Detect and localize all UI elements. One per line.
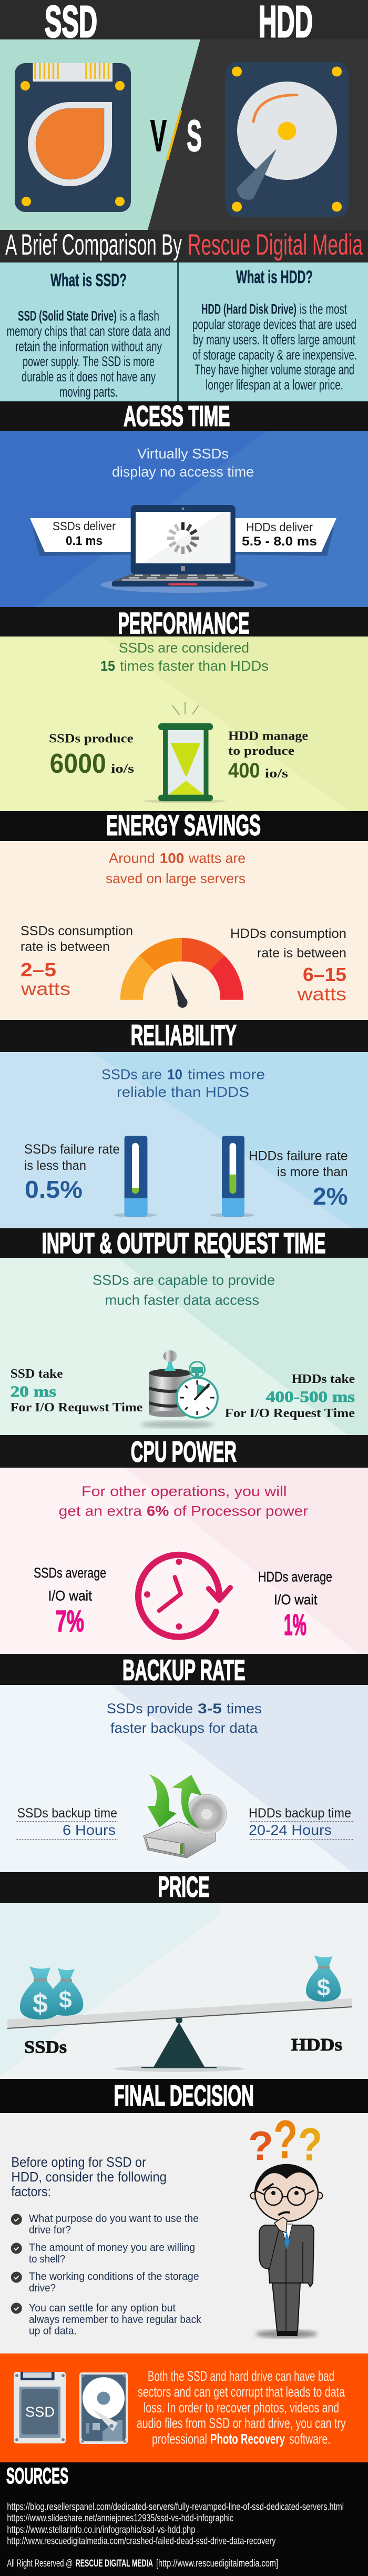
stat: HDD failure rate: 2% (313, 1183, 348, 1210)
heading: sources: SOURCES (6, 2463, 68, 2489)
icon: database with stopwatch (140, 1350, 218, 1428)
text block (59, 1483, 308, 1519)
stat: HDD failure rate: is more than (277, 1165, 348, 1179)
chart: HDD gauge bar (210, 1136, 254, 1217)
heading: backup rate: BACKUP RATE (122, 1654, 245, 1686)
text block: source links (7, 2502, 344, 2547)
hero: SSD versus HDD illustration (0, 39, 368, 230)
text block: intro (11, 2154, 167, 2199)
text block (93, 1272, 275, 1308)
stat: HDD backup time: 20-24 Hours (249, 1822, 332, 1838)
subtitle bar: A Brief Comparison By (5, 228, 182, 261)
panel: performance (0, 637, 368, 811)
heading: access time: ACESS TIME (124, 400, 230, 432)
heading: price (0, 1871, 368, 1903)
text block (112, 446, 254, 480)
stat: SSD throughput: 6000 (50, 749, 106, 779)
text block: intro: Before opting for SSD or (11, 2154, 146, 2170)
icon: thinking man: ? (298, 2118, 322, 2170)
stat: HDD consumption: watts (297, 985, 346, 1005)
callout: SSDs deliver: SSDs deliver (53, 519, 116, 533)
icon: thinking man (248, 2109, 323, 2338)
heading: reliability: RELIABILITY (131, 1018, 237, 1051)
chart: seesaw (7, 1998, 352, 2072)
list item: conditions: drive? (29, 2282, 56, 2294)
heading: performance: PERFORMANCE (118, 607, 249, 640)
panel: backup rate (0, 1685, 368, 1872)
text block: what is HDD (192, 267, 357, 393)
stat: HDD wait: I/O wait (274, 1592, 318, 1608)
text block: times faster than HDDs (120, 658, 269, 674)
stat: SSD consumption (21, 924, 133, 999)
icon: money bag on HDD side (306, 1955, 341, 2002)
text block: Virtually SSDs (137, 446, 229, 462)
stat: SSD failure rate: 0.5% (25, 1176, 83, 1203)
icon: solid state drive (15, 63, 131, 212)
panel: energy savings (0, 841, 368, 1020)
stat: HDD failure rate (249, 1149, 348, 1210)
stat: SSD request time: 20 ms (11, 1383, 56, 1400)
text block: 15 (100, 658, 115, 674)
stat: SSD throughput: SSDs produce (49, 732, 134, 746)
text block: what is SSD: power supply. The SSD is more (23, 353, 155, 369)
callout: HDDs deliver: HDDs deliver (246, 520, 313, 534)
panel: reliability (0, 1052, 368, 1228)
stat: HDD consumption: 6–15 (303, 964, 346, 985)
VS mark (150, 110, 202, 160)
text block: what is SSD: What is SSD? (50, 270, 127, 290)
icon: money bags on SSD side: $ (59, 1986, 72, 2013)
callout: SSDs deliver: 0.1 ms (66, 534, 103, 548)
stat: SSD wait: SSDs average (34, 1565, 106, 1581)
list item: backup: You can settle for any option but (29, 2302, 176, 2314)
heading: price: PRICE (158, 1871, 210, 1903)
stat: SSD failure rate: is less than (24, 1158, 86, 1173)
stat: HDD throughput: HDD manage (228, 730, 308, 743)
icon: thinking man: ? (248, 2123, 273, 2169)
text block: 6% (147, 1503, 169, 1519)
stat: HDD backup time: HDDs backup time (249, 1806, 351, 1821)
stat: SSD consumption: rate is between (21, 940, 110, 954)
text block: what is SSD: moving parts. (59, 384, 118, 400)
stat: SSD request time: For I/O Requwst Time (11, 1401, 143, 1415)
text block: times (227, 1701, 262, 1716)
panel: CPU power (0, 1468, 368, 1654)
text block (106, 851, 246, 886)
heading: backup rate (0, 1654, 368, 1686)
text block: 100 (160, 851, 184, 866)
text block (100, 640, 269, 674)
icon: thinking man: ? (273, 2109, 298, 2170)
text block: Around (109, 851, 155, 866)
text block: SSDs are capable to provide (93, 1272, 275, 1288)
stat: SSD wait (34, 1565, 106, 1638)
text block: source links: https://www.slideshare.net/anniejones12935/ssd-vs-hdd-infographic (7, 2513, 233, 2524)
stat: SSD consumption: SSDs consumption (21, 924, 133, 938)
label: HDDs: HDDs (291, 2035, 342, 2055)
stat: HDD wait (258, 1569, 332, 1642)
list item: conditions: The working conditions of the storage (29, 2271, 199, 2282)
stat: HDD backup time (249, 1806, 353, 1840)
stat: SSD backup time (16, 1806, 118, 1840)
panel: price (0, 1903, 368, 2079)
stat: HDD request time: HDDs take (291, 1372, 355, 1386)
text block: display no access time (112, 464, 254, 480)
text block: what is HDD: HDD (Hard Disk Drive) (201, 301, 297, 317)
chart: gauge (120, 938, 243, 1008)
list item: backup (11, 2302, 202, 2337)
text block: saved on large servers (106, 871, 246, 886)
stat: SSD throughput: io/s (111, 762, 134, 776)
stat: HDD failure rate: HDDs failure rate (249, 1149, 348, 1164)
icon: hourglass (144, 702, 226, 803)
text block: what is HDD: is the most (300, 301, 347, 317)
stat: HDD wait: HDDs average (258, 1569, 332, 1585)
stat: SSD wait: 7% (56, 1604, 84, 1638)
stat: HDD request time (225, 1372, 355, 1420)
text block: For other operations, you will (81, 1483, 287, 1499)
stat: HDD wait: 1% (284, 1608, 306, 1642)
heading: access time (0, 400, 368, 432)
stat: SSD wait: I/O wait (48, 1588, 92, 1604)
text block: source links: https://www.stellarinfo.co.in/infographic/ssd-vs-hdd.php (7, 2524, 195, 2535)
icon: clock with arrow (138, 1555, 230, 1637)
icon: money bag on HDD side: $ (317, 1974, 330, 2001)
stat: HDD consumption (230, 926, 346, 1005)
stat: SSD backup time: SSDs backup time (17, 1806, 117, 1821)
text block: what is SSD: durable as it does not have any (22, 369, 156, 385)
icon: HDD (79, 2372, 128, 2444)
stat: HDD throughput: 400 (228, 759, 260, 782)
stat: SSD request time: SSD take (11, 1367, 63, 1381)
text block: what is SSD: memory chips that can store data and (6, 323, 170, 339)
heading: final decision: FINAL DECISION (114, 2079, 254, 2112)
text block: SSDs are (101, 1067, 162, 1083)
icon: hard disk drive (226, 62, 349, 217)
heading: performance (0, 607, 368, 640)
chart: SSD gauge bar (114, 1136, 157, 1217)
stat: HDD consumption: rate is between (257, 946, 346, 961)
stat: HDD throughput: io/s (265, 767, 288, 781)
text block: copyright (7, 2558, 278, 2569)
text block: reliable than HDDS (117, 1084, 249, 1100)
stat: HDD throughput (228, 730, 308, 782)
text block: copyright: RESCUE DIGITAL MEDIA (76, 2558, 153, 2569)
title bar: SSD and HDD (0, 0, 368, 46)
text block: recovery advice: Photo Recovery (210, 2431, 285, 2447)
text block: copyright: [http://www.rescuedigitalmedia.com] (156, 2558, 278, 2569)
panel: final decision (0, 2109, 368, 2353)
panel: recovery note (0, 2353, 368, 2462)
text block: recovery advice (137, 2368, 346, 2447)
icon: laptop with spinner (100, 505, 268, 593)
stat: HDD request time: 400-500 ms (266, 1388, 355, 1406)
list item: purpose: What purpose do you want to use the (29, 2213, 199, 2225)
list item: money: to shell? (29, 2254, 65, 2265)
list item: money: The amount of money you are willing (29, 2242, 195, 2254)
stat: SSD throughput (49, 732, 134, 779)
text block: what is SSD: SSD (Solid State Drive) (18, 308, 117, 324)
panel: request time (0, 1258, 368, 1435)
panel: sources (0, 2462, 368, 2576)
icon: SSD: SSD (25, 2404, 55, 2420)
stat: HDD throughput: to produce (228, 744, 294, 758)
text block: of Processor power (173, 1503, 308, 1519)
text block: SSDs are considered (119, 640, 249, 656)
text block: what is SSD: retain the information without any (15, 338, 162, 354)
text block (107, 1701, 262, 1736)
text block: times more (188, 1067, 265, 1083)
stat: HDD request time: For I/O Request Time (225, 1407, 355, 1420)
text block: source links: http://www.rescuedigitalmedia.com/crashed-failed-dead-ssd-drive-data-recovery (7, 2536, 276, 2547)
icon: SSD (14, 2372, 66, 2443)
icon: backup drive and disc (144, 1774, 227, 1858)
stat: SSD failure rate: SSDs failure rate (24, 1142, 120, 1157)
list item: purpose: drive for? (29, 2225, 71, 2236)
list item: conditions (11, 2271, 199, 2294)
stat: SSD failure rate (24, 1142, 120, 1203)
text block: copyright: All Right Reserved @ (7, 2558, 73, 2569)
text block: faster backups for data (110, 1720, 258, 1736)
panel: access time (0, 431, 368, 607)
callout: HDDs deliver: 5.5 - 8.0 ms (242, 534, 317, 549)
icon: money bags on SSD side (20, 1966, 83, 2019)
stat: SSD backup time: 6 Hours (63, 1822, 116, 1838)
stat: HDD consumption: HDDs consumption (230, 926, 346, 941)
heading: CPU power (0, 1435, 368, 1468)
list item: money (11, 2242, 195, 2265)
text block: 10 (167, 1067, 182, 1083)
heading: final decision (0, 2079, 368, 2113)
icon: money bags on SSD side: $ (33, 1988, 48, 2019)
text block: recovery advice: professional (152, 2431, 207, 2447)
callout: SSDs deliver (30, 518, 137, 556)
text block: recovery advice: software. (289, 2431, 331, 2447)
stat: SSD consumption: 2–5 (21, 959, 56, 981)
text block: 3-5 (198, 1701, 222, 1716)
text block: what is HDD: What is HDD? (236, 267, 313, 287)
text block: much faster data access (105, 1292, 259, 1308)
stat: SSD request time (11, 1367, 143, 1415)
list item: purpose (11, 2213, 199, 2236)
heading: reliability (0, 1018, 368, 1052)
text block: watts are (188, 851, 246, 866)
list item: backup: always remember to have regular back (29, 2314, 202, 2326)
text block: intro: factors: (11, 2184, 51, 2199)
text block: get an extra (59, 1503, 142, 1519)
text block: what is SSD (6, 270, 170, 400)
callout: HDDs deliver (231, 518, 336, 556)
label: SSDs: SSDs (24, 2038, 67, 2057)
VS mark: S (187, 111, 202, 160)
text block: SSDs provide (107, 1701, 193, 1716)
heading: CPU power: CPU POWER (131, 1435, 237, 1468)
panel: definitions (0, 262, 368, 401)
text block (101, 1067, 265, 1100)
VS mark: V (150, 111, 167, 160)
list item: backup: up of data. (29, 2326, 77, 2337)
text block: what is SSD: is a flash (120, 308, 159, 324)
heading: energy savings: ENERGY SAVINGS (106, 809, 261, 842)
stat: SSD consumption: watts (21, 979, 70, 999)
text block: intro: HDD, consider the following (11, 2169, 167, 2185)
